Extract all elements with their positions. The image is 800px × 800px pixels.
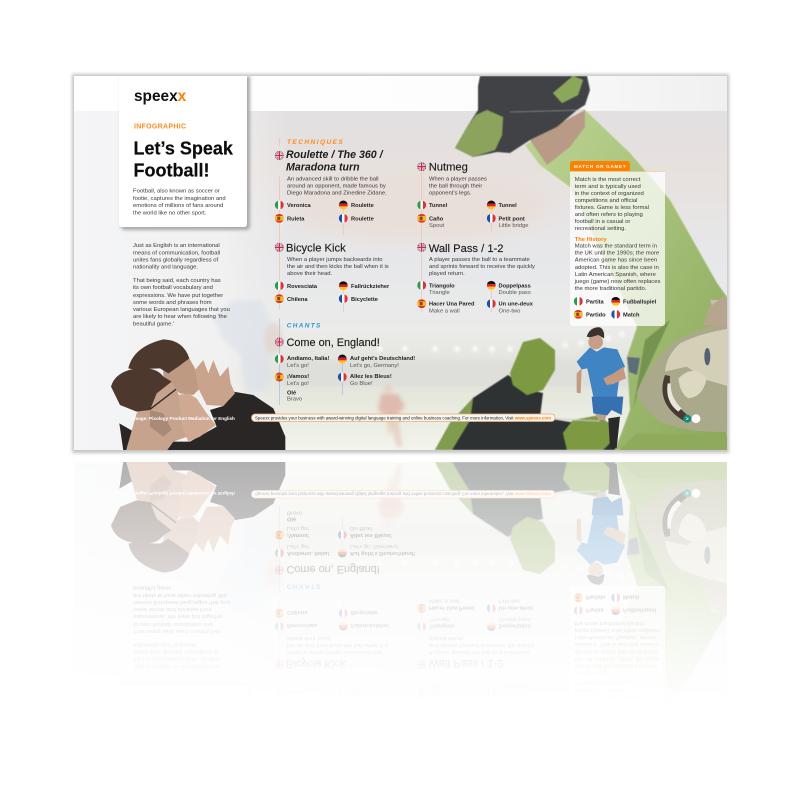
chant: come on, england: Go Blue!	[350, 381, 373, 387]
chant: come on, england: ¡Vamos!	[287, 374, 309, 380]
technique: wall pass: A player passes the ball to a teammate	[429, 257, 530, 263]
title: Let’s Speak	[134, 138, 234, 158]
technique: nutmeg: When a player passes	[429, 176, 487, 182]
intro text: emotions of millions of fans around	[133, 203, 223, 209]
goalkeeper hand behind card	[704, 296, 727, 326]
faded background player: blue	[213, 300, 282, 392]
technique: bicycle kick	[275, 243, 390, 303]
goalkeeper: top glove	[455, 76, 590, 157]
left column text: expressions. We have put together	[133, 293, 223, 299]
logo: speexx: speexx	[134, 88, 187, 105]
callout: match or game: Fußballspiel	[623, 299, 657, 305]
chant: come on, england: Allez les Bleus!	[350, 374, 392, 380]
goalkeeper: lower arm and gloves	[435, 338, 617, 450]
image credit: Image: Pixology Product Mediation for English	[133, 416, 235, 421]
technique: nutmeg: Caño	[429, 216, 444, 222]
left column text: unites fans globally regardless of	[133, 258, 218, 264]
callout: match or game: Partita	[586, 299, 605, 305]
technique: roulette: around an opponent, made famous by	[287, 184, 386, 190]
technique: bicycle kick: Rovesciata	[287, 284, 318, 290]
callout: match or game: Match is the most correct	[575, 177, 641, 183]
chant: come on, england	[275, 337, 415, 403]
callout: match or game: American game has since been	[575, 258, 657, 264]
technique: wall pass: One-two	[498, 309, 520, 315]
technique: bicycle kick: the air and then kicks the ball when it is	[287, 264, 389, 270]
technique: wall pass: Doppelpass	[498, 284, 531, 290]
left column text: nationality and language.	[133, 264, 198, 270]
technique: roulette: Veronica	[287, 203, 312, 209]
technique: bicycle kick: Fallrückzieher	[351, 284, 390, 290]
technique: nutmeg: Spout	[429, 223, 445, 229]
technique: roulette: Maradona turn	[286, 162, 360, 174]
intro text: Football, also known as soccer or	[133, 188, 220, 194]
fan: back man	[128, 339, 235, 406]
technique: roulette: Roulette / The 360 /	[286, 149, 384, 161]
label: infographic: INFOGRAPHIC	[134, 124, 186, 130]
technique: nutmeg: opponent’s legs.	[429, 190, 472, 196]
goalkeeper face	[620, 300, 730, 452]
infographic panel	[74, 76, 730, 452]
callout: match or game: football in a casual or	[575, 219, 630, 225]
technique: wall pass: Triangolo	[429, 284, 455, 290]
technique: nutmeg: Little bridge	[498, 223, 528, 229]
callout: match or game: competitions and official	[575, 198, 637, 204]
left column text	[133, 243, 230, 328]
technique: bicycle kick: Chilena	[287, 297, 308, 303]
title: Football!	[134, 160, 209, 180]
goalkeeper: sleeve and body	[435, 76, 727, 450]
left column text: its own football vocabulary and	[133, 285, 213, 291]
callout: match or game: The History	[575, 237, 607, 243]
left column text: means of communication, football	[133, 250, 220, 256]
left column text: That being said, each country has	[133, 278, 221, 284]
panel drop shadow	[72, 74, 729, 453]
technique: roulette: Ruleta	[287, 216, 305, 222]
technique: bicycle kick: Bicyclette	[351, 297, 378, 303]
fan: front man	[111, 368, 216, 451]
callout: match or game: MATCH OR GAME?	[574, 164, 626, 169]
intro text: the world like no other sport.	[133, 210, 207, 216]
callout: match or game	[570, 161, 665, 326]
left column text: beautiful game.’	[133, 322, 174, 328]
callout: match or game: the more traditional partido.	[575, 286, 647, 292]
technique: wall pass: and sprints forward to receive the quickly	[429, 264, 535, 270]
section label: techniques: TECHNIQUES	[287, 139, 344, 146]
chant: come on, england: Let’s go, Germany!	[350, 363, 399, 369]
callout: match or game: juego (game) now often replaces	[574, 279, 661, 285]
section label: chants: CHANTS	[287, 323, 322, 330]
technique: nutmeg: Petit pont	[498, 216, 525, 222]
callout: match or game: adopted. This is also the case in	[575, 265, 659, 271]
left column text: various European languages that you	[133, 307, 230, 313]
left column text: Just as English is an international	[133, 243, 220, 249]
callout: match or game: Match	[623, 312, 640, 318]
technique: wall pass: Un une-deux	[498, 302, 534, 308]
callout: match or game: Partido	[586, 312, 606, 318]
technique: roulette: An advanced skill to dribble the ball	[287, 176, 379, 182]
technique: nutmeg: Tunnel	[498, 203, 517, 209]
technique: bicycle kick: above their head.	[287, 271, 333, 277]
technique: nutmeg: Nutmeg	[429, 162, 468, 174]
technique: bicycle kick: Bicycle Kick	[286, 243, 346, 255]
footer strip: Speexx provides your business with award-winning digital language training and online business coaching. For more information, Visit www.speexx.com	[255, 416, 551, 421]
intro text: footie, captures the imagination and	[133, 196, 226, 202]
technique: roulette: Roulette	[351, 203, 374, 209]
technique: wall pass: Triangle	[429, 290, 450, 296]
callout: match or game: Latin American Spanish, where	[575, 272, 657, 278]
mirrored reflection of the panel	[111, 462, 727, 675]
goalkeeper: wrist	[530, 110, 585, 165]
technique: wall pass: Make a wall	[429, 309, 460, 315]
technique: wall pass: Wall Pass / 1-2	[429, 243, 504, 255]
callout: match or game: the UK until the 1990s; the more	[575, 251, 660, 257]
navigation dots: >	[686, 417, 689, 423]
callout: match or game: in the context of organized	[575, 191, 644, 197]
callout: match or game: Match was the standard term in	[575, 244, 657, 250]
chant: come on, england: Come on, England!	[286, 337, 380, 349]
chant: come on, england: Auf geht’s Deutschland!	[350, 356, 415, 362]
chant: come on, england: Let’s go!	[287, 381, 309, 387]
callout: match or game: and often refers to playing	[575, 212, 643, 218]
technique: wall pass: Hacer Una Pared	[429, 302, 475, 308]
technique: nutmeg: the ball through their	[429, 184, 482, 190]
technique: nutmeg: Tunnel	[429, 203, 448, 209]
chant: come on, england: Bravo	[287, 397, 302, 403]
callout: match or game: fixtures. Game is less formal	[575, 205, 649, 211]
left column text: are likely to hear when following ‘the	[133, 314, 227, 320]
chant: come on, england: Andiamo, Italia!	[287, 356, 329, 362]
callout body	[570, 172, 665, 326]
technique: nutmeg	[417, 162, 528, 229]
background photo: stadium sky	[74, 76, 727, 450]
technique: wall pass: Double pass	[498, 290, 531, 296]
left column text: some words and phrases from	[133, 300, 212, 306]
chant: come on, england: Olé	[287, 391, 296, 397]
blue shirt footballer	[577, 327, 626, 448]
technique: roulette	[275, 149, 387, 223]
fans: jacket	[119, 392, 285, 451]
technique: wall pass	[417, 243, 535, 315]
technique: roulette: Diego Maradona and Zinedine Zidane.	[287, 190, 387, 196]
technique: wall pass: played return.	[429, 271, 465, 277]
faded background player: red	[378, 385, 405, 447]
callout: match or game: term and is typically used	[575, 184, 641, 190]
white title card	[119, 76, 250, 230]
shouting fans photo	[111, 339, 285, 451]
technique: roulette: Roulette	[351, 216, 374, 222]
technique: bicycle kick: When a player jumps backwards into	[287, 257, 382, 263]
callout tab	[570, 161, 630, 171]
navigation dots	[683, 414, 700, 423]
footer strip	[252, 414, 555, 422]
chant: come on, england: Let’s go!	[287, 363, 309, 369]
callout: match or game: recreational setting.	[575, 226, 626, 232]
vertical guide lines	[280, 138, 491, 405]
